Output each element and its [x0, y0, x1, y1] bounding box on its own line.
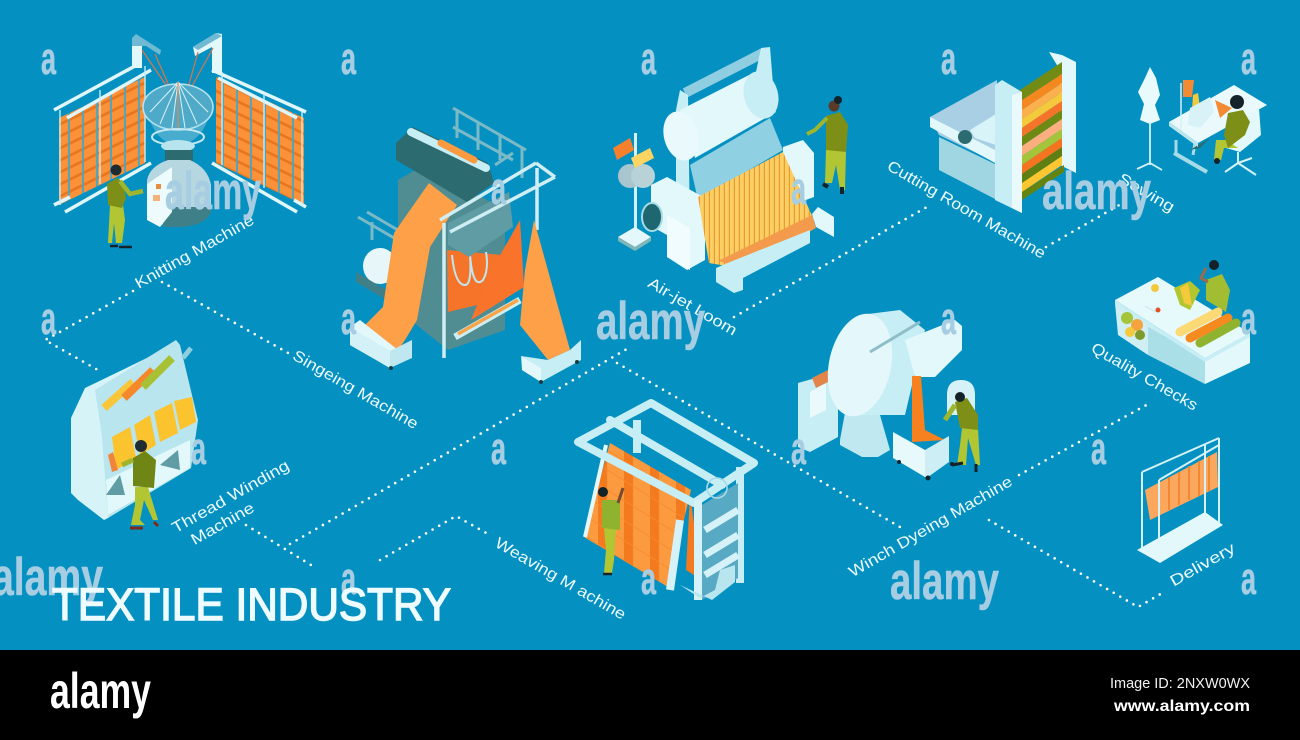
watermarks: alamy: [165, 162, 261, 221]
orange cloth: [912, 376, 945, 442]
table: [1115, 277, 1250, 384]
website: www.alamy.com: [1113, 698, 1250, 715]
watermarks: a: [491, 163, 507, 214]
seated worker: [1214, 95, 1250, 164]
yarn fabric: [698, 152, 814, 268]
title: TEXTILE INDUSTRY: [52, 579, 451, 630]
singeing machine: [350, 108, 581, 384]
back railing: [453, 108, 526, 178]
label: winch dyeing machine: Winch Dyeing Machine: [846, 473, 1016, 581]
quality checks: [1115, 260, 1250, 384]
machine body: [147, 150, 211, 227]
label: sewing: Sewing: [1115, 170, 1177, 216]
footer band: [0, 650, 1300, 740]
front face: [95, 340, 198, 518]
fabric rolls: [1180, 312, 1236, 343]
watermarks: a: [1091, 423, 1107, 474]
watermarks: alamy: [596, 292, 705, 351]
fabric rolls rack: [1014, 62, 1064, 200]
watermarks: a: [491, 423, 507, 474]
right spool rack: [212, 70, 306, 212]
worker: [1201, 260, 1230, 312]
body: [398, 165, 505, 350]
delivery rack: [1137, 438, 1223, 563]
front posts: [670, 500, 698, 600]
dark top roller: [396, 127, 494, 202]
watermarks: a: [641, 33, 657, 84]
front railing: [440, 163, 555, 358]
glass dome: [143, 82, 213, 152]
label: thread winding machine: Thread Winding: [169, 457, 292, 537]
worker: [598, 487, 623, 574]
hand wheel: [707, 478, 727, 498]
label: thread winding machine: [169, 457, 292, 549]
fabric band: [718, 215, 816, 268]
dotted flow connectors: [45, 200, 1164, 607]
back posts: [637, 420, 740, 583]
worker: [107, 164, 143, 247]
cloth beam: [658, 67, 784, 165]
worker: [122, 440, 158, 528]
right hanging fabric: [520, 220, 570, 360]
yellow cones: [112, 397, 196, 470]
watermarks: a: [791, 423, 807, 474]
label: cutting room machine: Cutting Room Machine: [884, 158, 1048, 262]
inner orange panel: [686, 495, 702, 580]
upper fabric rolls: [104, 358, 172, 408]
base rollers: [680, 565, 735, 600]
watermarks: alamy: [890, 552, 999, 611]
watermarks: a: [791, 163, 807, 214]
central frame: [690, 118, 783, 200]
label: air-jet loom: Air-jet Loom: [645, 275, 740, 339]
label: weaving machine: Weaving M achine: [492, 535, 629, 623]
spool stand: [613, 133, 655, 251]
mannequin: [1137, 67, 1162, 170]
back post: [1049, 52, 1076, 173]
cart: [893, 432, 954, 480]
watermarks: [0, 33, 1257, 611]
control cabinet: [798, 370, 838, 452]
footer logo: alamy: [50, 663, 151, 719]
watermarks: a: [341, 293, 357, 344]
side face: [71, 343, 178, 520]
side slats: [705, 510, 738, 575]
watermarks: a: [341, 553, 357, 604]
worker: [945, 392, 980, 472]
sewing machine and thread: [1181, 80, 1232, 130]
air-jet loom: [613, 47, 848, 293]
cloth: [584, 443, 691, 587]
watermarks: a: [1241, 553, 1257, 604]
shelf contents: [1121, 312, 1145, 340]
left spool rack: [54, 66, 151, 212]
right side panel: [702, 483, 738, 600]
watermarks: a: [41, 293, 57, 344]
watermarks: a: [191, 423, 207, 474]
chair: [1225, 108, 1261, 175]
right cabinet: [783, 140, 814, 205]
desk: [1169, 85, 1267, 172]
left cart: [350, 320, 412, 370]
left hanging fabric: [360, 183, 457, 350]
watermarks: a: [1241, 33, 1257, 84]
label: delivery: Delivery: [1167, 540, 1239, 590]
worker: [807, 96, 848, 194]
watermarks: alamy: [1042, 162, 1151, 221]
left frame edge: [585, 445, 606, 537]
cutting room machine: [930, 52, 1076, 213]
drum supports: [840, 380, 890, 457]
tank: [947, 380, 975, 415]
thread winding machine: [71, 340, 198, 528]
left housing: [642, 177, 705, 270]
lower shelf details: [106, 440, 190, 515]
label: singeing machine: Singeing Machine: [290, 347, 421, 433]
center box: [448, 192, 513, 257]
deep orange fabric: [471, 220, 524, 320]
overhead arms and threads: [132, 33, 222, 88]
light bar: [183, 348, 191, 358]
step labels: [132, 158, 1239, 623]
label: knitting machine: Knitting Machine: [132, 212, 257, 292]
label: thread winding machine: Machine: [188, 499, 257, 549]
front post: [995, 80, 1022, 213]
frame: [1142, 438, 1219, 560]
watermarks: a: [341, 33, 357, 84]
cloth sample and scissors: [1145, 281, 1200, 312]
right cart: [521, 340, 581, 384]
sewing station: [1137, 67, 1267, 175]
rear frame: [685, 53, 763, 93]
knitting machine: [54, 33, 306, 247]
looped fabric: [447, 250, 502, 312]
platform: [1137, 512, 1223, 563]
top frame: [578, 403, 754, 503]
garments: [1145, 452, 1218, 520]
watermarks: a: [941, 33, 957, 84]
weaving machine: [578, 403, 754, 600]
label: quality checks: Quality Checks: [1088, 340, 1201, 415]
arm hood: [905, 320, 962, 377]
left railing and roll: [356, 212, 432, 308]
image id: Image ID: 2NXW0WX: [1110, 676, 1250, 692]
lower beam: [716, 207, 834, 293]
drum cylinder: [819, 308, 925, 422]
table: [930, 80, 997, 200]
watermarks: a: [641, 553, 657, 604]
watermarks: a: [941, 293, 957, 344]
watermarks: a: [1241, 293, 1257, 344]
winch dyeing machine: [798, 308, 980, 480]
watermarks: a: [41, 33, 57, 84]
garment folds: [1159, 456, 1209, 514]
